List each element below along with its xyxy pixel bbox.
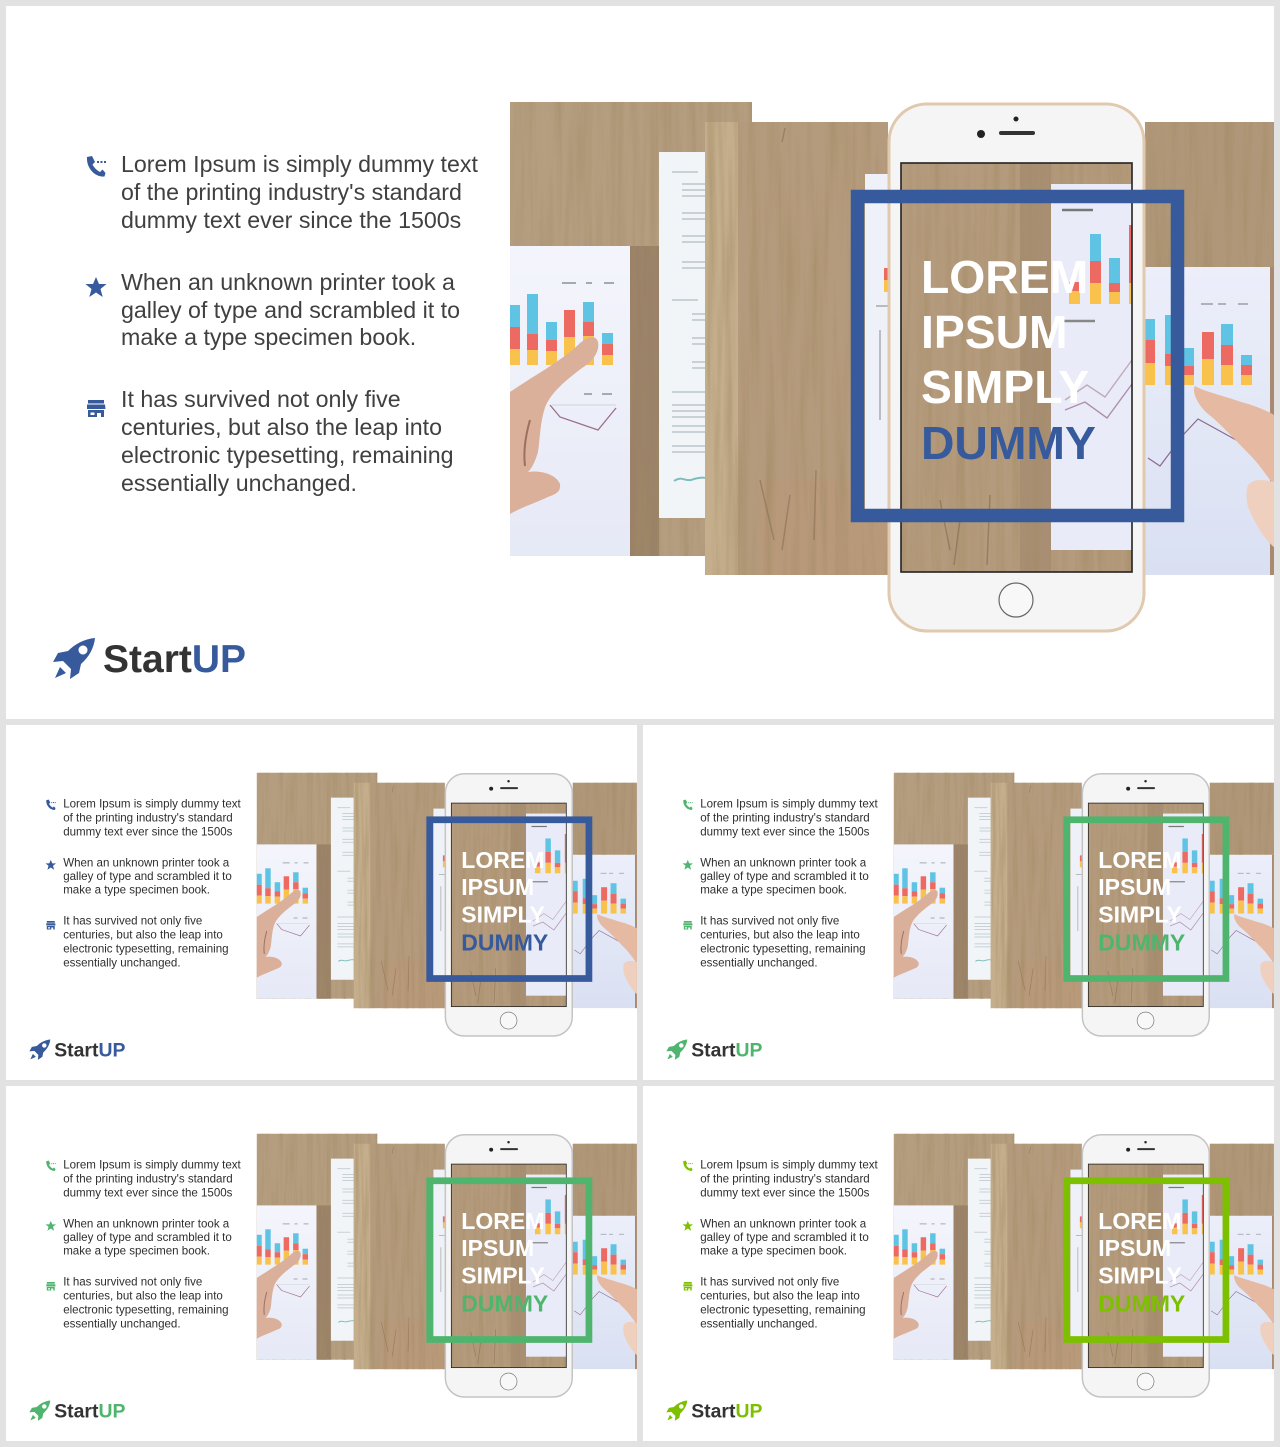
text block: second point: make a type specimen book.: [700, 885, 847, 897]
text block: third point: electronic typesetting, remaining: [63, 1304, 229, 1316]
panel: small blue slide: [6, 725, 637, 1080]
logo: StartUP: [54, 1039, 125, 1061]
icon: store: [87, 400, 106, 417]
headline: SIMPLY: [1098, 902, 1182, 928]
text block: first point: dummy text ever since the 1500s: [700, 1187, 870, 1199]
icon: phone: [46, 1161, 56, 1171]
headline: SIMPLY: [1098, 1263, 1182, 1289]
panel: main blue slide: [6, 6, 1274, 719]
headline: DUMMY: [1098, 929, 1185, 955]
text block: third point: essentially unchanged.: [121, 470, 357, 496]
headline: IPSUM: [1098, 874, 1171, 900]
icon: star: [683, 860, 693, 870]
icon: phone: [46, 800, 56, 810]
panel: small lime slide: [643, 1086, 1274, 1441]
text block: first point: Lorem Ipsum is simply dummy text: [121, 151, 478, 177]
text block: third point: It has survived not only five: [700, 916, 839, 928]
phone mockup: [1082, 1135, 1209, 1397]
text block: second point: When an unknown printer took a: [121, 269, 455, 295]
icon: phone: [87, 156, 106, 177]
text block: third point: electronic typesetting, remaining: [700, 943, 866, 955]
text block: first point: Lorem Ipsum is simply dummy text: [700, 799, 879, 811]
headline: LOREM: [921, 251, 1088, 303]
logo: StartUP: [103, 638, 246, 681]
square frame: [858, 196, 1178, 516]
headline: LOREM: [1098, 847, 1181, 873]
text block: second point: galley of type and scrambled it to: [121, 297, 460, 323]
icon: phone: [683, 800, 693, 810]
square frame: [1067, 820, 1226, 979]
slide background: [6, 6, 1274, 719]
text block: first point: of the printing industry's standard: [63, 1174, 233, 1186]
headline: LOREM: [461, 847, 544, 873]
headline: IPSUM: [1098, 1235, 1171, 1261]
slide content: [29, 1134, 637, 1422]
headline: SIMPLY: [921, 361, 1089, 413]
phone mockup: [445, 1135, 572, 1397]
panel: small green slide top: [643, 725, 1274, 1080]
photo collage: [894, 773, 1274, 1008]
icon: store: [46, 1282, 55, 1290]
text block: third point: It has survived not only five: [700, 1277, 839, 1289]
text block: third point: It has survived not only five: [63, 916, 202, 928]
text block: third point: electronic typesetting, remaining: [700, 1304, 866, 1316]
text block: first point: Lorem Ipsum is simply dummy text: [63, 799, 242, 811]
logo icon: rocket: [666, 1400, 687, 1421]
icon: store: [683, 1282, 692, 1290]
slide background: [643, 1086, 1274, 1441]
headline: IPSUM: [921, 306, 1068, 358]
text block: first point: Lorem Ipsum is simply dummy text: [700, 1160, 879, 1172]
text block: first point: Lorem Ipsum is simply dummy text: [63, 1160, 242, 1172]
text block: second point: galley of type and scrambled it to: [700, 1232, 869, 1244]
text block: second point: galley of type and scrambled it to: [63, 871, 232, 883]
headline: DUMMY: [461, 929, 548, 955]
photo collage: [257, 1134, 637, 1369]
text block: second point: make a type specimen book.: [63, 1246, 210, 1258]
slide content: [666, 1134, 1274, 1422]
headline: LOREM: [1098, 1208, 1181, 1234]
text block: third point: centuries, but also the leap into: [63, 1290, 223, 1302]
icon: store: [683, 921, 692, 929]
text block: third point: centuries, but also the leap into: [63, 929, 223, 941]
text block: second point: make a type specimen book.: [700, 1246, 847, 1258]
headline: SIMPLY: [461, 1263, 545, 1289]
text block: first point: of the printing industry's standard: [121, 179, 462, 205]
headline: IPSUM: [461, 874, 534, 900]
text block: second point: galley of type and scrambled it to: [700, 871, 869, 883]
logo: StartUP: [691, 1039, 762, 1061]
text block: third point: essentially unchanged.: [700, 957, 818, 969]
headline: SIMPLY: [461, 902, 545, 928]
slide content: [29, 773, 637, 1061]
photo collage: [894, 1134, 1274, 1369]
slide content: [666, 773, 1274, 1061]
icon: phone: [683, 1161, 693, 1171]
square frame: [430, 1181, 589, 1340]
text block: second point: When an unknown printer took a: [700, 857, 867, 869]
phone mockup: [445, 774, 572, 1036]
text block: first point: of the printing industry's standard: [63, 813, 233, 825]
text block: first point: dummy text ever since the 1500s: [63, 826, 233, 838]
logo icon: rocket: [29, 1400, 50, 1421]
icon: star: [86, 277, 106, 297]
panel: small green slide bottom: [6, 1086, 637, 1441]
slide background: [6, 725, 637, 1080]
logo: StartUP: [691, 1400, 762, 1422]
text block: third point: electronic typesetting, remaining: [121, 442, 454, 468]
phone mockup: [1082, 774, 1209, 1036]
slide background: [643, 725, 1274, 1080]
text block: second point: make a type specimen book.: [63, 885, 210, 897]
icon: star: [46, 860, 56, 870]
headline: IPSUM: [461, 1235, 534, 1261]
text block: second point: When an unknown printer took a: [700, 1218, 867, 1230]
text block: third point: essentially unchanged.: [63, 1318, 181, 1330]
icon: star: [683, 1221, 693, 1231]
logo icon: rocket: [53, 638, 95, 679]
text block: first point: of the printing industry's standard: [700, 813, 870, 825]
photo collage: [257, 773, 637, 1008]
logo icon: rocket: [29, 1039, 50, 1060]
square frame: [1067, 1181, 1226, 1340]
icon: star: [46, 1221, 56, 1231]
phone mockup: [889, 104, 1144, 631]
slide background: [6, 1086, 637, 1441]
icon: store: [46, 921, 55, 929]
text block: third point: essentially unchanged.: [700, 1318, 818, 1330]
headline: DUMMY: [921, 417, 1096, 469]
headline: DUMMY: [461, 1290, 548, 1316]
text block: third point: It has survived not only five: [63, 1277, 202, 1289]
square frame: [430, 820, 589, 979]
text block: second point: When an unknown printer took a: [63, 857, 230, 869]
text block: first point: dummy text ever since the 1500s: [700, 826, 870, 838]
text block: third point: electronic typesetting, remaining: [63, 943, 229, 955]
text block: third point: centuries, but also the leap into: [700, 929, 860, 941]
logo icon: rocket: [666, 1039, 687, 1060]
text block: third point: centuries, but also the leap into: [700, 1290, 860, 1302]
text block: first point: dummy text ever since the 1500s: [63, 1187, 233, 1199]
headline: LOREM: [461, 1208, 544, 1234]
text block: first point: dummy text ever since the 1500s: [121, 207, 461, 233]
text block: third point: essentially unchanged.: [63, 957, 181, 969]
text block: second point: make a type specimen book.: [121, 324, 416, 350]
logo: StartUP: [54, 1400, 125, 1422]
text block: first point: of the printing industry's standard: [700, 1174, 870, 1186]
headline: DUMMY: [1098, 1290, 1185, 1316]
text block: third point: It has survived not only five: [121, 386, 401, 412]
text block: third point: centuries, but also the leap into: [121, 414, 442, 440]
photo collage: wood panels with charts: [510, 102, 1274, 575]
text block: second point: When an unknown printer took a: [63, 1218, 230, 1230]
text block: second point: galley of type and scrambled it to: [63, 1232, 232, 1244]
